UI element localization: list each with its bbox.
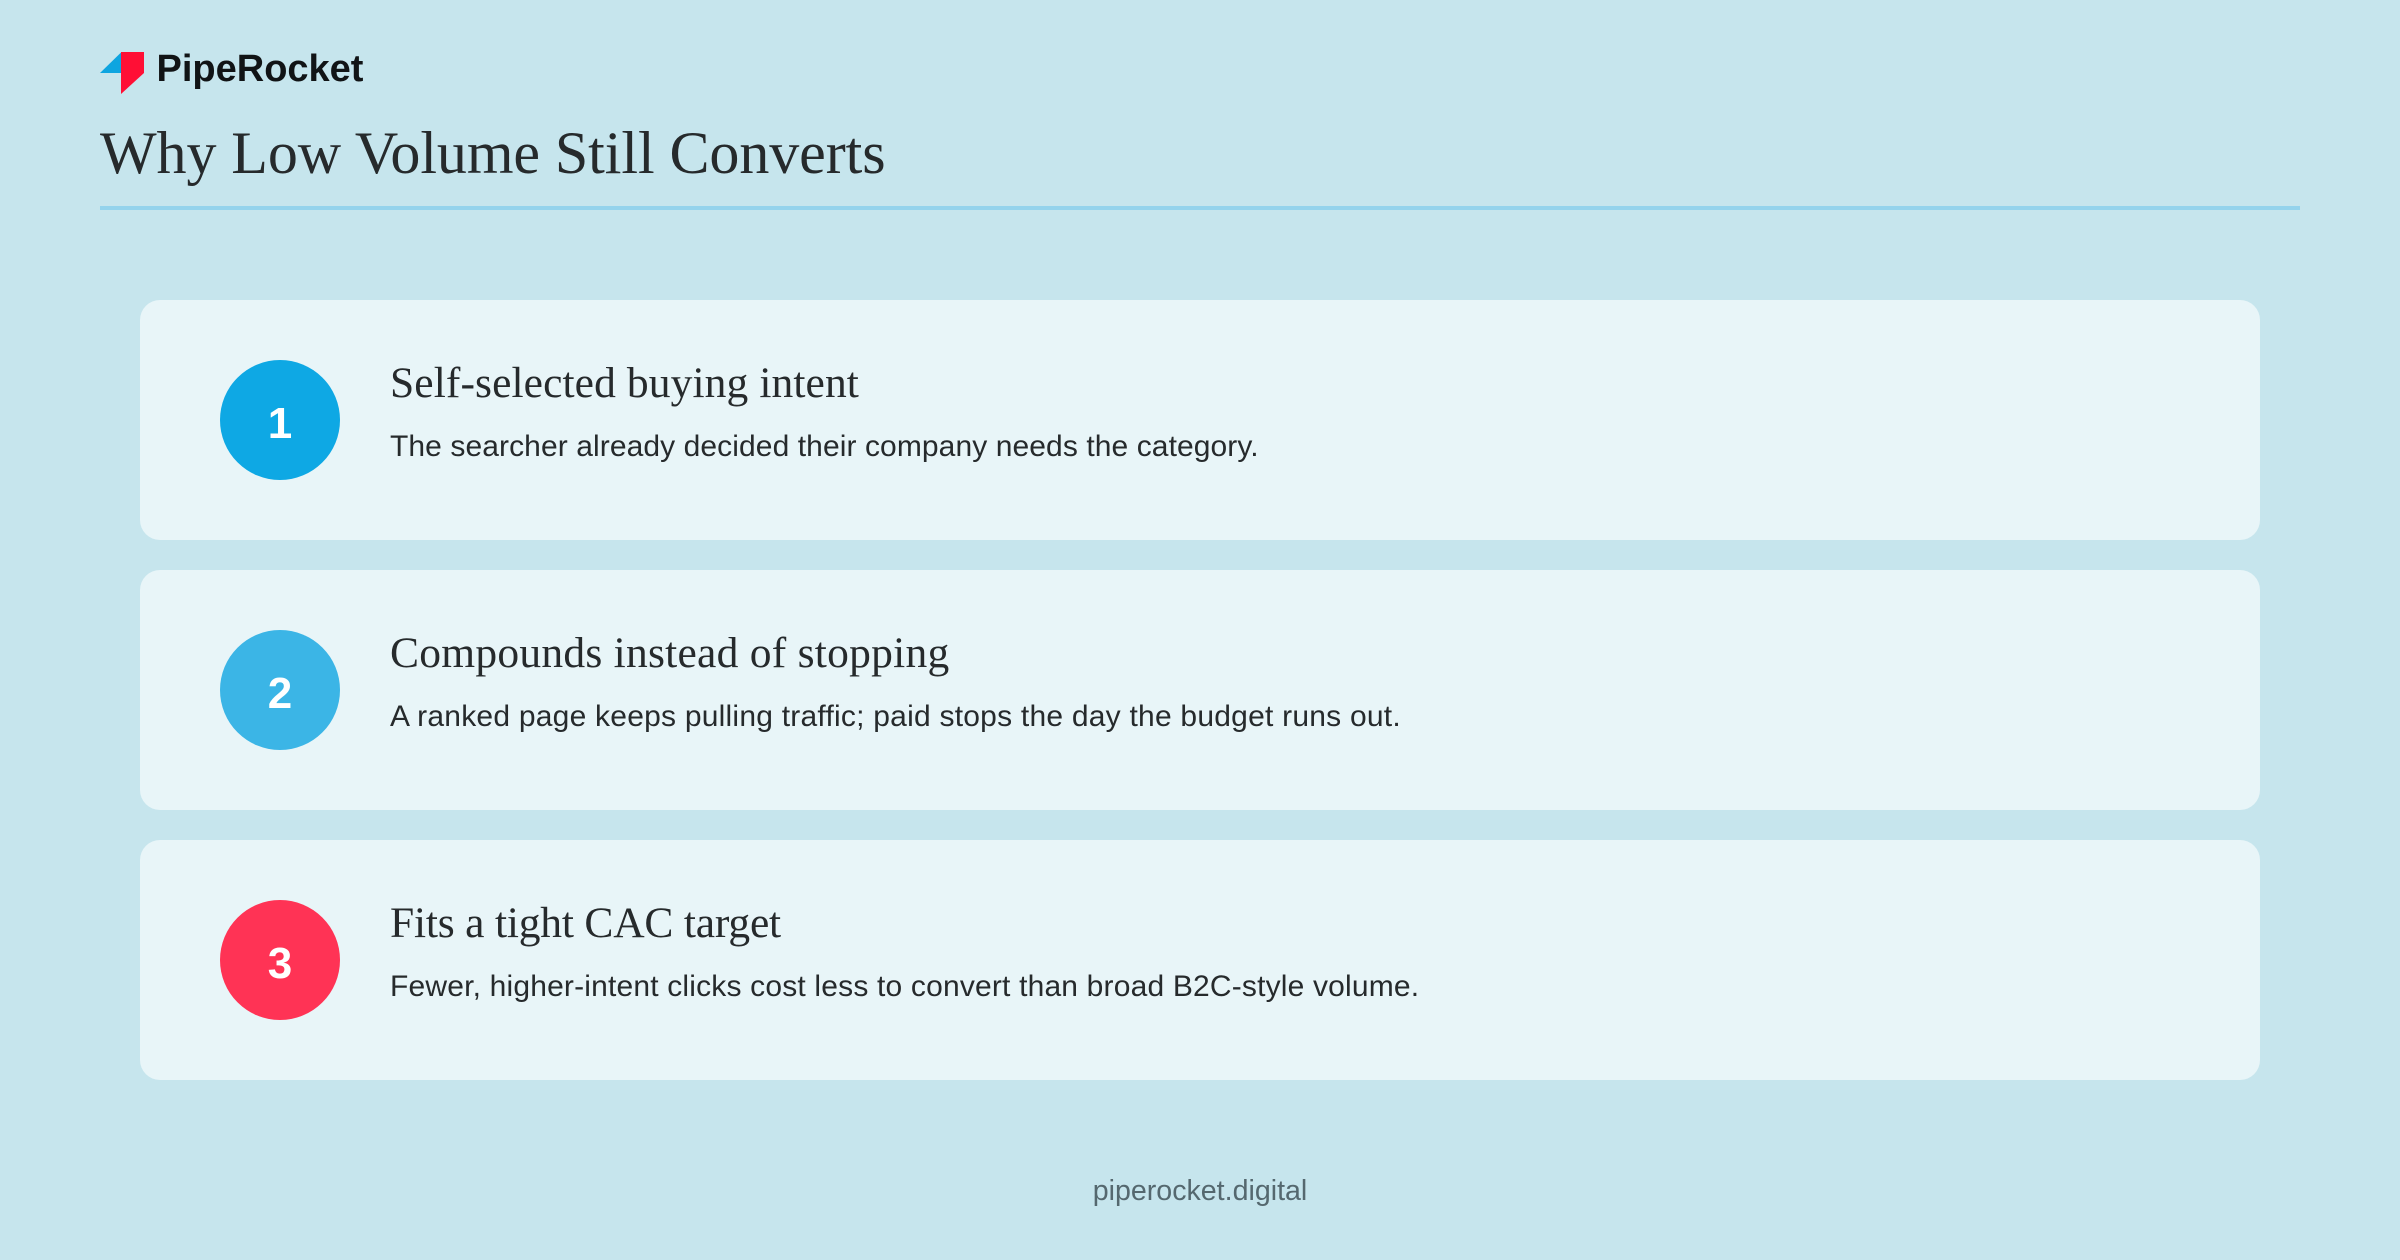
number badge 2: [220, 630, 340, 750]
logo wordmark: PipeRocket: [156, 48, 363, 90]
description 2: A ranked page keeps pulling traffic; paid stops the day the budget runs out.: [390, 700, 1401, 733]
icon: rocket mark: [100, 52, 144, 94]
heading 1: Self-selected buying intent: [390, 359, 859, 407]
heading 3: Fits a tight CAC target: [390, 899, 781, 947]
number badge 1: [220, 360, 340, 480]
panel: reason 3: [140, 840, 2260, 1080]
description 1: The searcher already decided their company needs the category.: [390, 430, 1259, 463]
number badge 3: [220, 900, 340, 1020]
number badge 1: 1: [268, 399, 292, 448]
number badge 3: 3: [268, 939, 292, 988]
heading 2: Compounds instead of stopping: [390, 629, 949, 677]
footer: piperocket.digital: [1093, 1175, 1307, 1207]
number badge 2: 2: [268, 669, 292, 718]
panel: reason 1: [140, 300, 2260, 540]
panel: reason 2: [140, 570, 2260, 810]
logo: PipeRocket: [100, 48, 363, 94]
title: Why Low Volume Still Converts: [100, 120, 885, 186]
description 3: Fewer, higher-intent clicks cost less to convert than broad B2C-style volume.: [390, 970, 1419, 1003]
